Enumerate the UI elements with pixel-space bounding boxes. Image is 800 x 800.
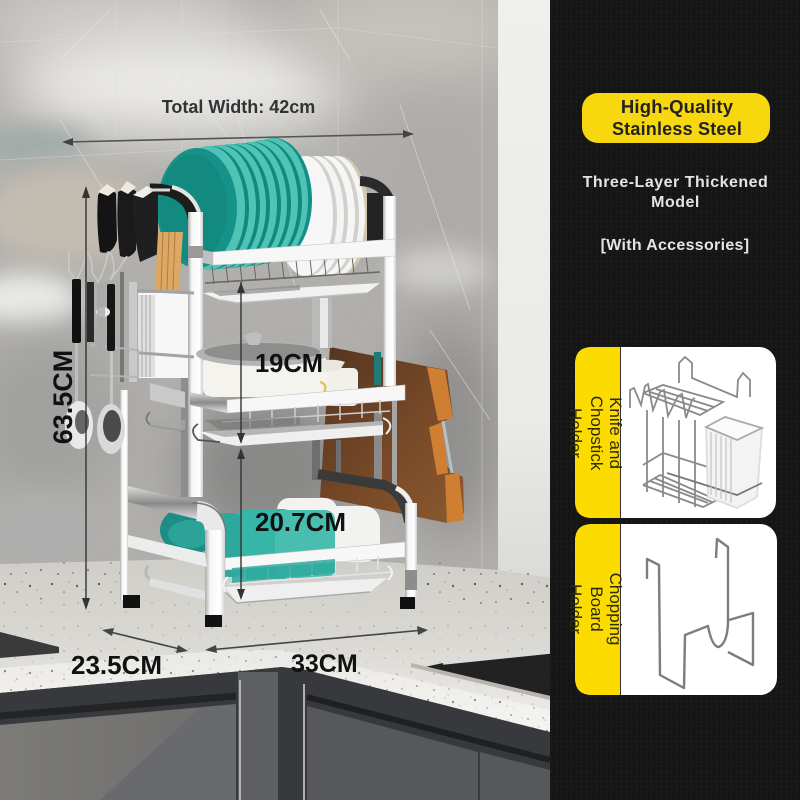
left sink edge [0,632,59,658]
side accessory: utensil holder [90,272,194,382]
label: chopping board holder: Board [587,586,606,632]
side accessory: chopsticks [155,232,183,290]
label: chopping board holder: Chopping [606,573,625,645]
middle gap arrow [237,282,245,444]
yellow heading badge [582,93,770,143]
lower gap arrow [237,448,245,600]
side accessory: knives [97,181,170,262]
right cabinet doors [307,706,478,800]
right sink [411,652,550,698]
subtitle: Three-Layer Thickened [583,174,768,191]
top front bar [213,239,395,265]
subtitle [583,174,768,211]
icon: chopping board holder [647,539,753,688]
left cabinet door [0,704,236,800]
subtitle: Model [651,194,700,211]
center post [238,672,278,800]
length arrow [205,626,428,653]
total width arrow [62,130,414,146]
total height arrow [82,186,90,610]
20.7CM label: 20.7CM [255,507,346,537]
depth arrow [102,628,188,653]
33CM label: 33CM [291,650,358,678]
panel: knife and chopstick holder [566,347,776,518]
yellow heading badge: High-Quality [621,96,734,117]
total width label: Total Width: 42cm [162,97,315,117]
countertop [0,556,550,732]
side accessory: hooks and ladles [65,250,127,454]
bottom shelf bowls [160,498,380,579]
white plates [277,156,369,276]
right black panel [550,0,800,800]
19CM label: 19CM [255,350,323,378]
23.5CM label: 23.5CM [71,650,162,680]
icon: knife and chopstick holder [630,357,762,508]
label: knife and chopstick holder [566,396,625,471]
cabinets [0,667,550,800]
label: chopping board holder [566,573,625,645]
top shelf wire grid [205,255,380,284]
label: chopping board holder: Holder [566,584,585,634]
upper rack frame [150,181,396,497]
teal plates [157,138,312,270]
rack back posts [312,298,397,485]
accessories note: [With Accessories] [601,237,749,254]
panel: chopping board holder [566,524,777,695]
label: knife and chopstick holder: Knife and [606,397,625,469]
top drip tray [203,283,380,303]
yellow heading badge: Stainless Steel [612,119,742,139]
label: knife and chopstick holder: Chopstick [587,396,606,471]
middle shelf [146,383,405,446]
background: kitchen wall [0,0,550,600]
middle drip tray [200,423,383,446]
label: knife and chopstick holder: Holder [566,408,585,458]
pot and cup on middle shelf [196,332,358,406]
cutting board [320,347,464,523]
lower rack frame [120,390,417,615]
rack feet [123,595,415,627]
total height label: 63.5CM [48,350,78,444]
